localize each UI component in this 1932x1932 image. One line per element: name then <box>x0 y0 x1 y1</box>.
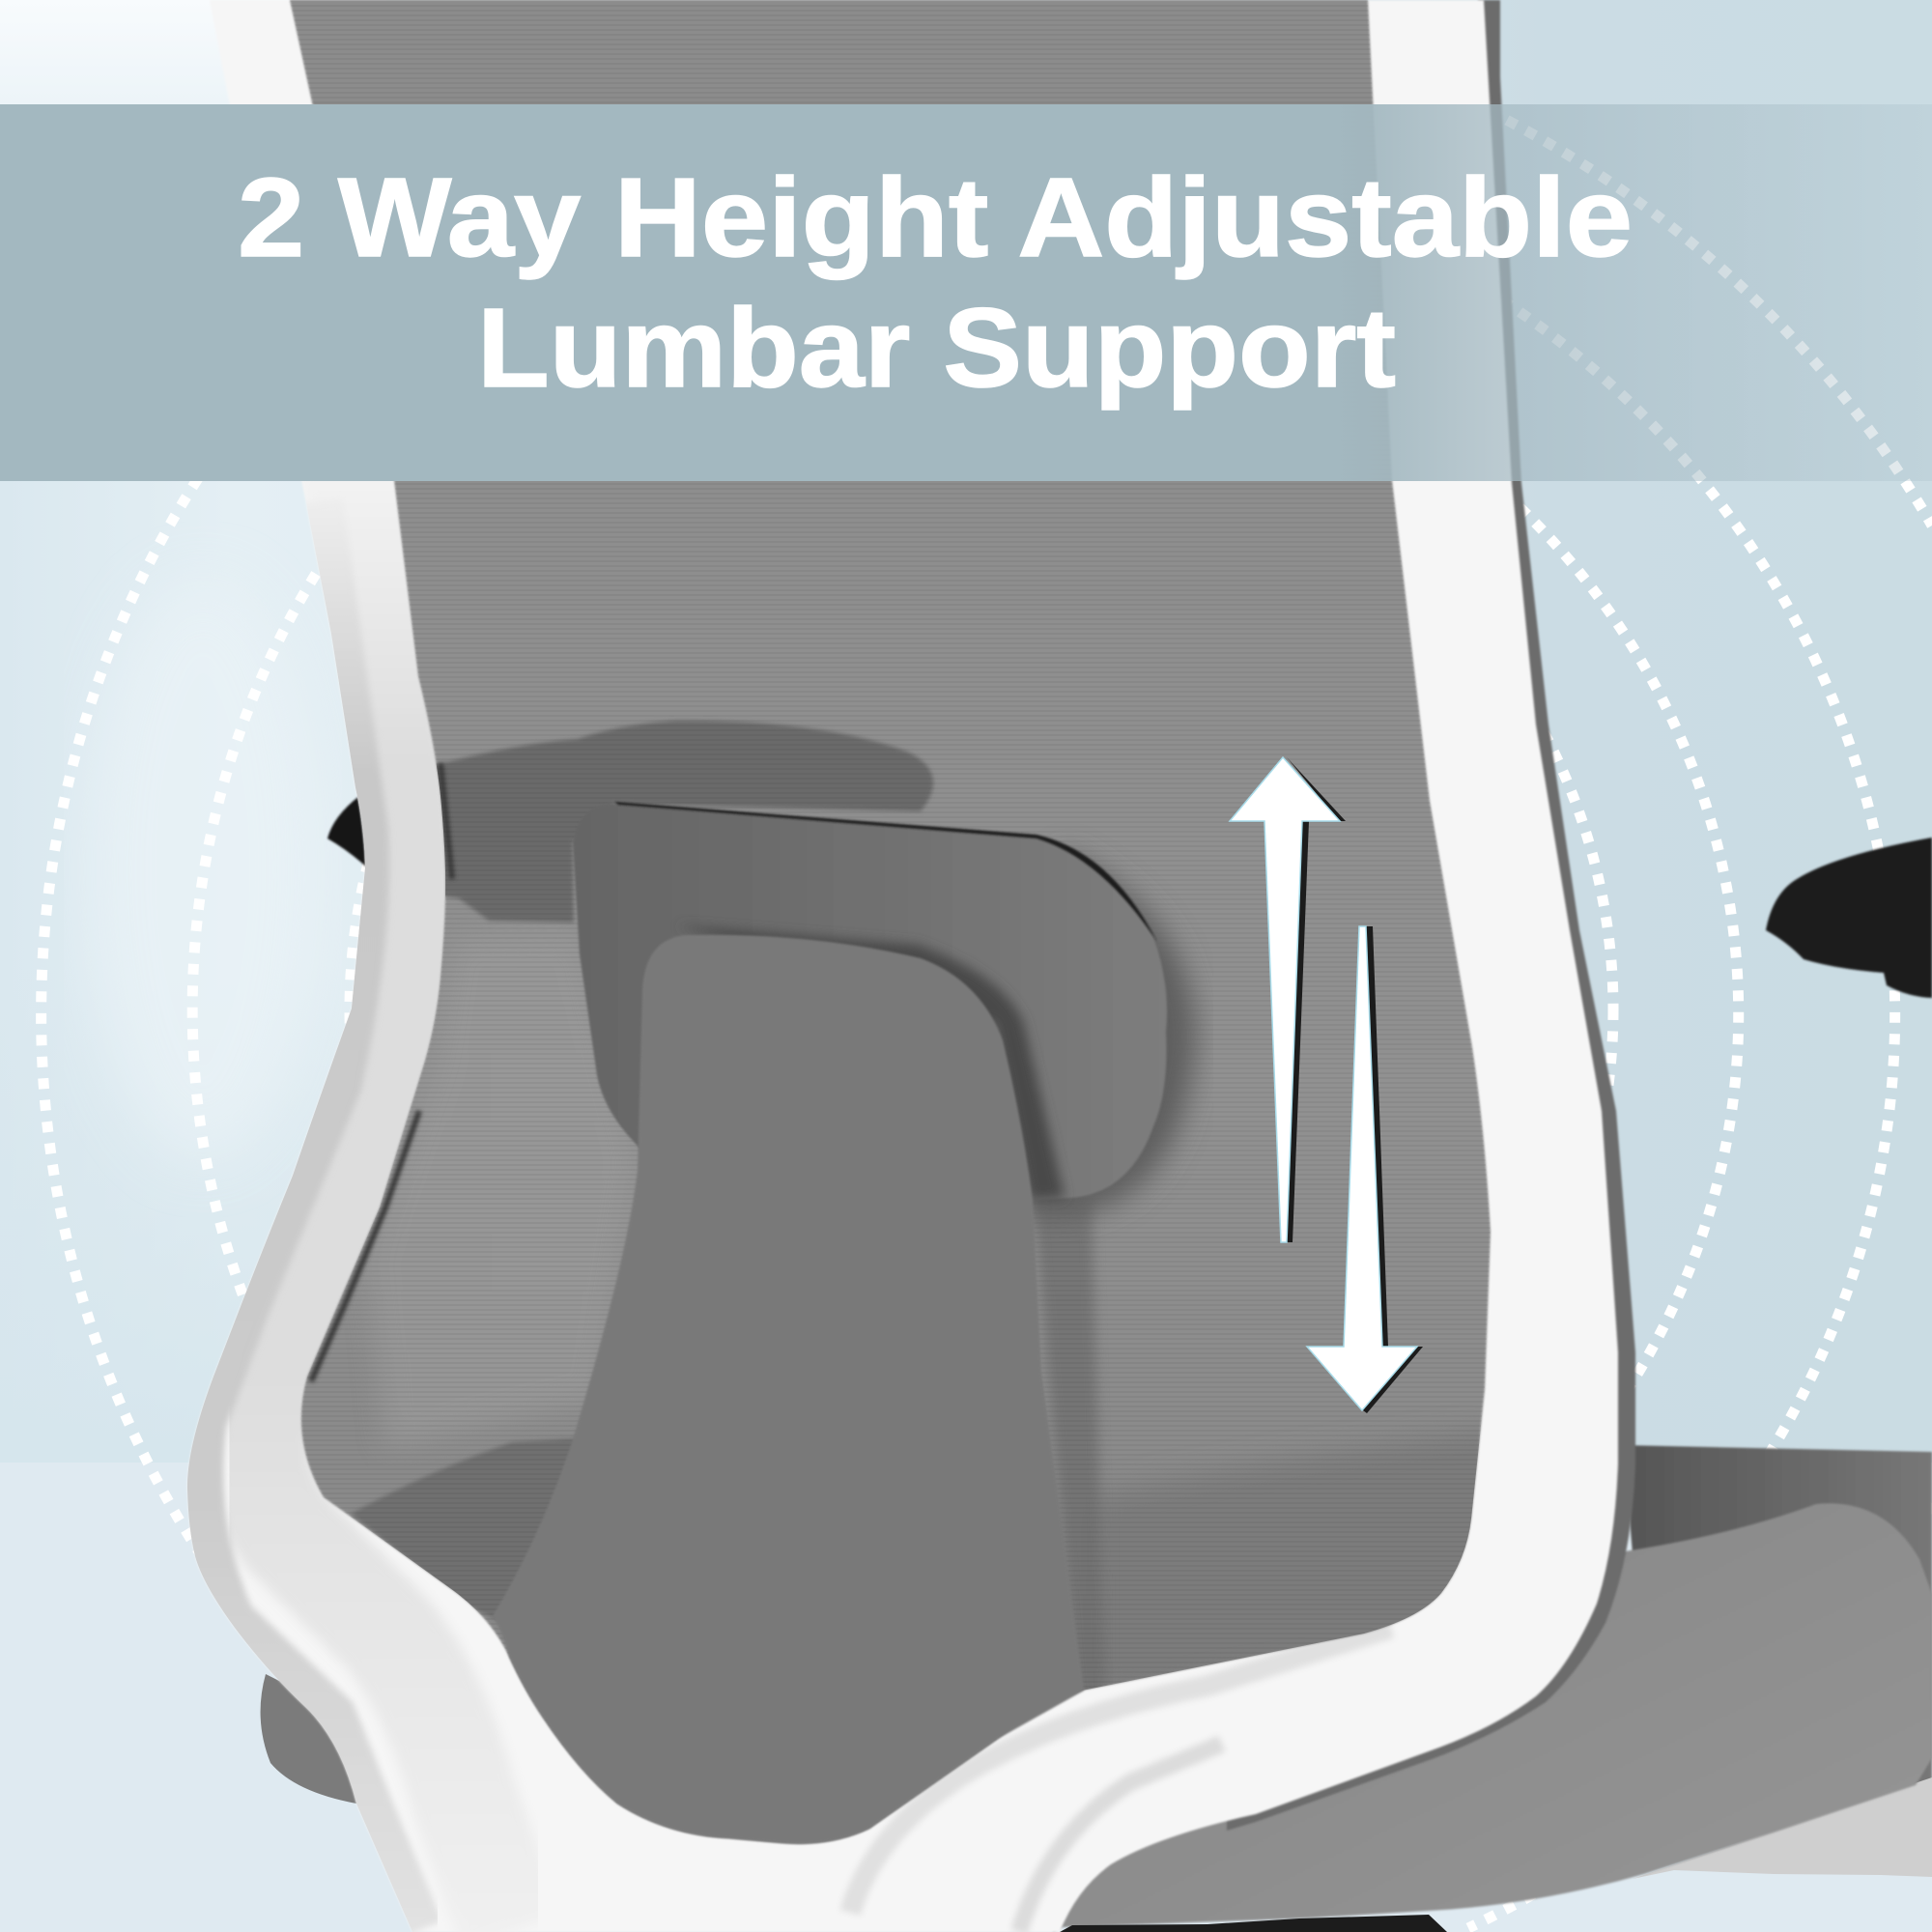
mesh back <box>290 0 1491 1844</box>
lumbar wing <box>573 804 1167 1200</box>
left armrest <box>327 796 367 867</box>
arrow: down <box>1307 926 1423 1413</box>
frame shading <box>194 444 1391 1932</box>
title banner <box>0 104 1932 481</box>
mesh dark patch behind lumbar <box>425 721 933 923</box>
mesh frame edge shadow <box>311 763 452 1381</box>
frame left tone <box>255 444 512 1932</box>
white frame <box>187 0 1618 1932</box>
lumbar wing dark top edge <box>614 802 1157 942</box>
arrow: up <box>1230 757 1346 1242</box>
mesh weave texture <box>290 0 1491 1648</box>
left seat cushion edge <box>261 1674 356 1804</box>
seat base light edge <box>1633 1777 1932 1879</box>
right armrest <box>1766 838 1932 998</box>
seat cushion <box>1053 1503 1932 1932</box>
lumbar support plate <box>493 935 1084 1844</box>
frame outer band <box>194 502 415 1932</box>
mesh lighter area <box>383 1177 616 1435</box>
frame back strip <box>1227 0 1635 1831</box>
mesh lower left shadow <box>351 1437 573 1619</box>
mesh details <box>290 0 1491 1690</box>
black base <box>1060 1915 1447 1932</box>
frame lower crease <box>1019 1744 1222 1932</box>
title: 2 Way Height Adjustable <box>238 155 1633 280</box>
title <box>238 155 1633 411</box>
lumbar wing inner shadow <box>676 925 1065 1200</box>
mesh column shadow under lumbar <box>1034 1198 1106 1710</box>
frame lower bevel near plate <box>850 1628 1391 1913</box>
seat shell <box>1623 1445 1932 1797</box>
title: Lumbar Support <box>477 285 1396 411</box>
lumbar wing shadow <box>1024 850 1196 1217</box>
mesh lower right shadow <box>1092 1430 1507 1700</box>
